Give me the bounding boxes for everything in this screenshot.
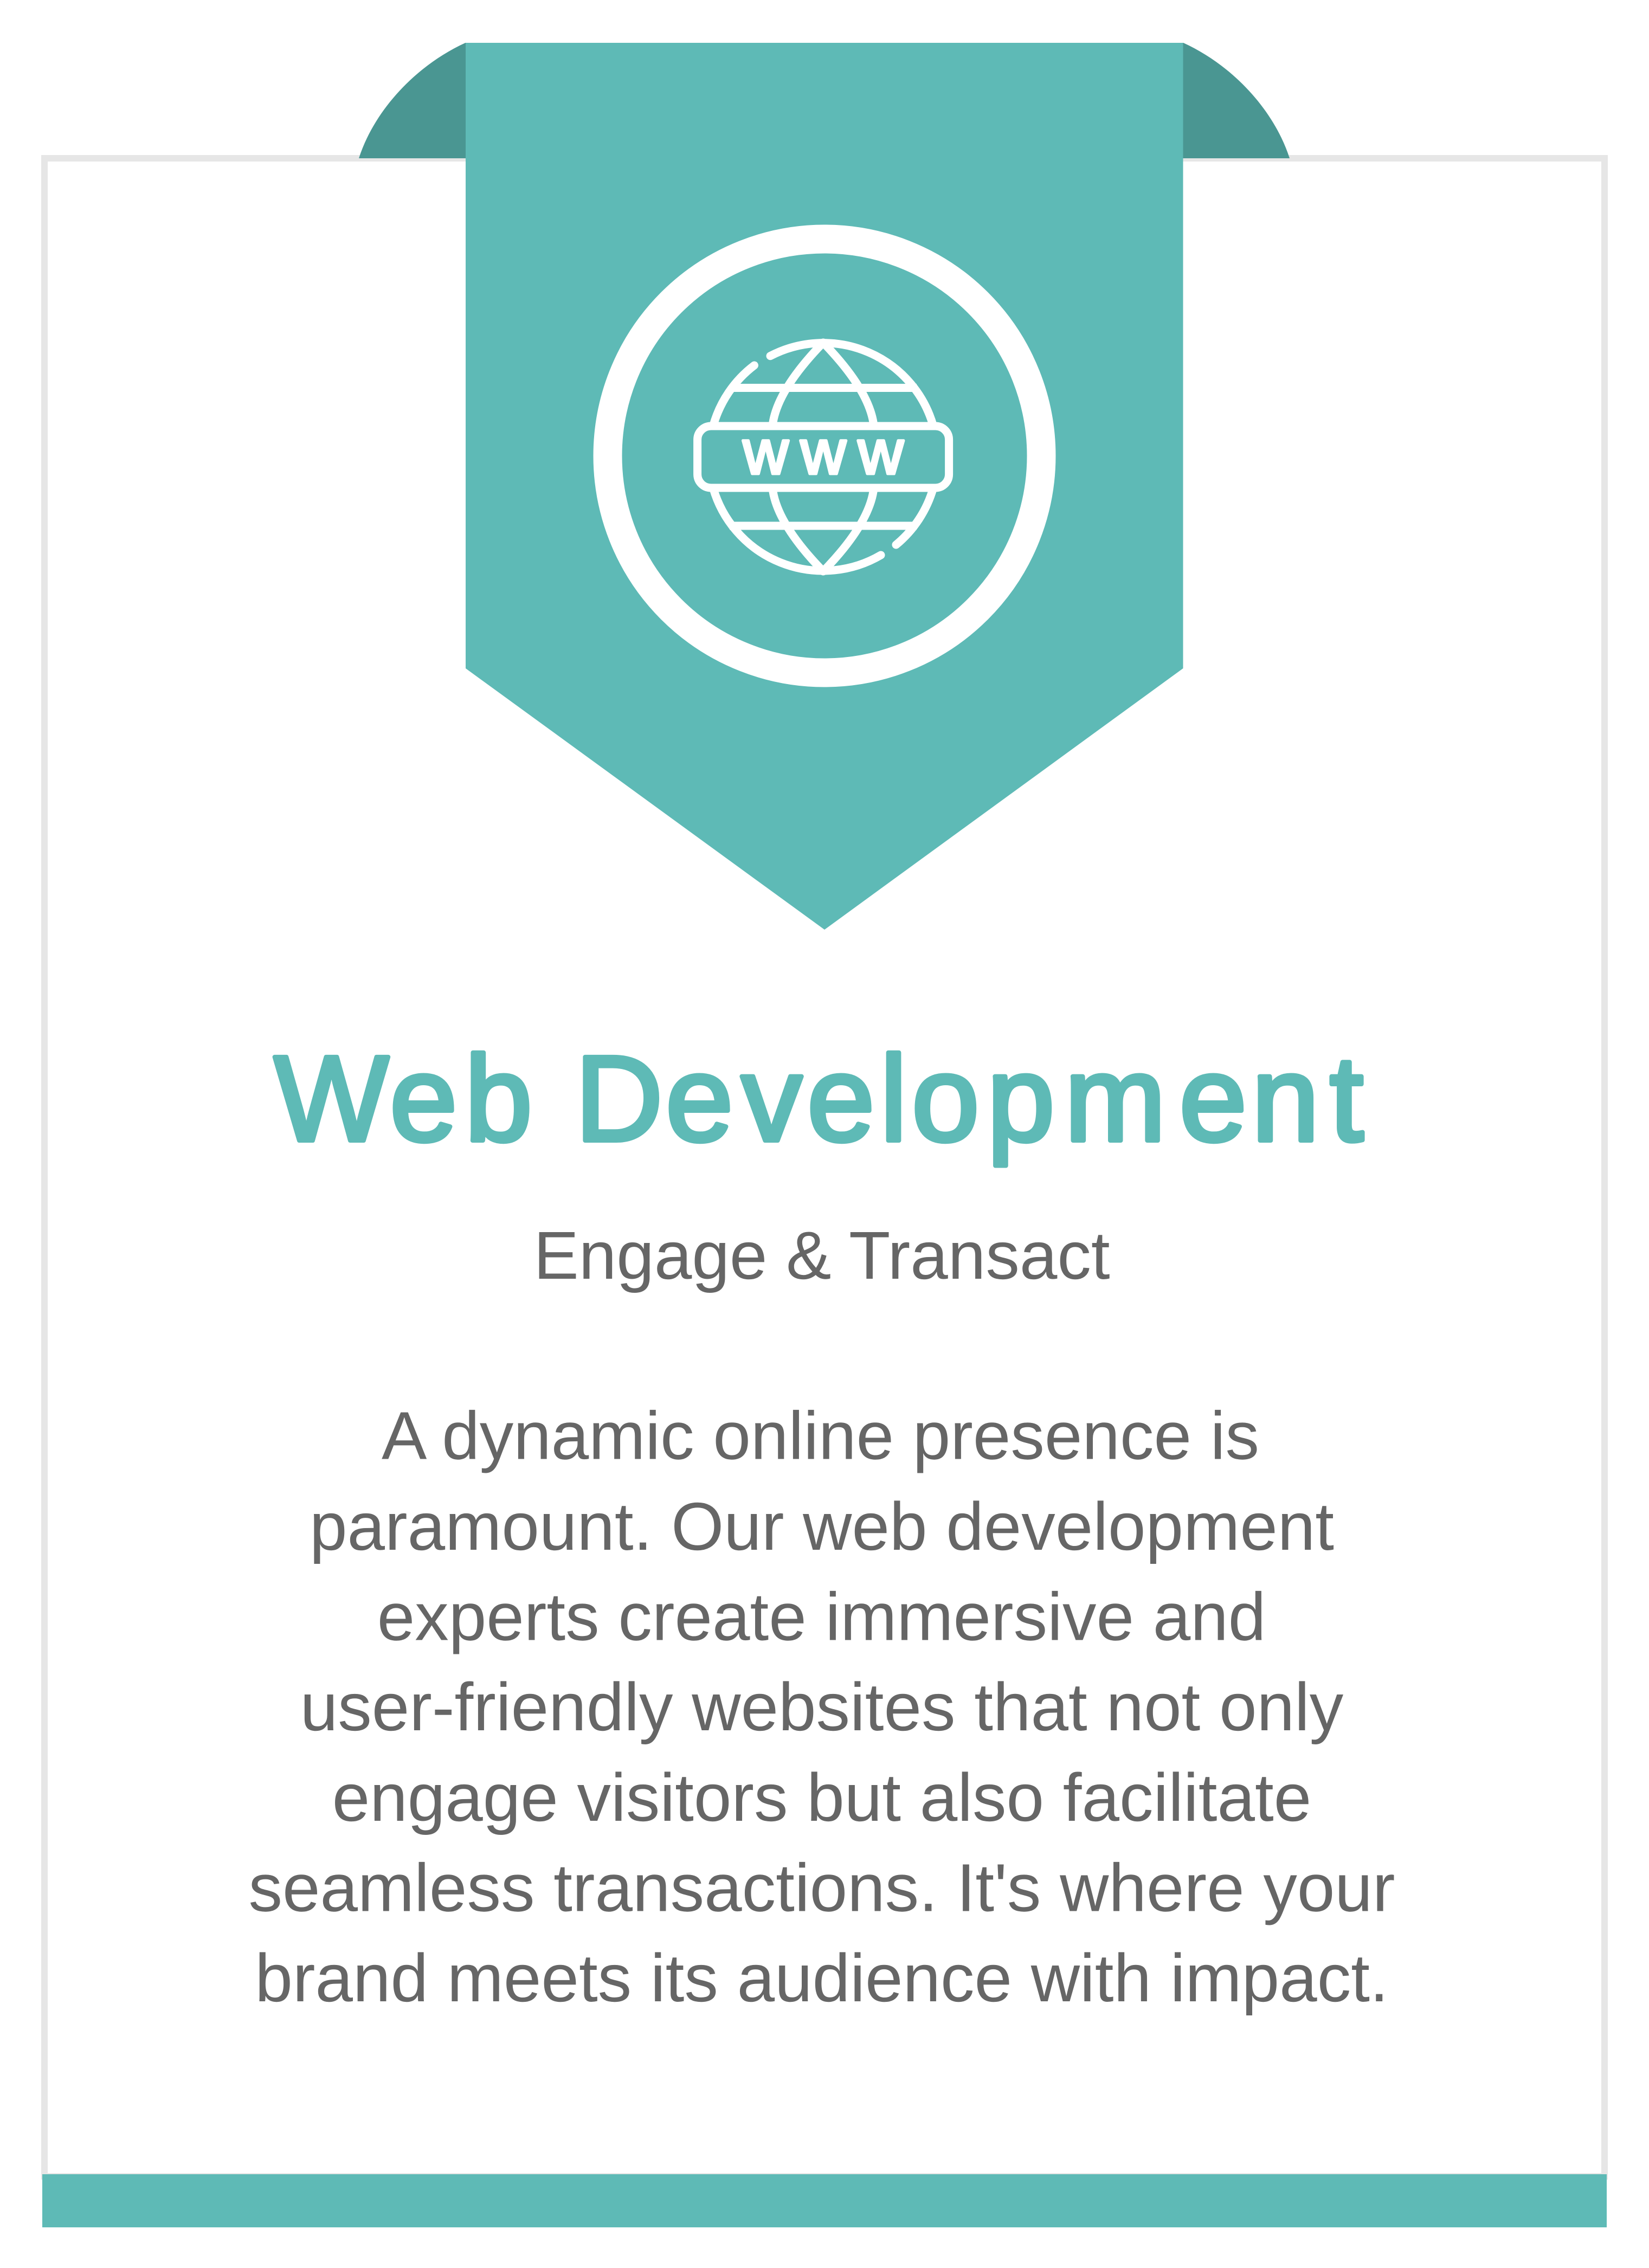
body text: engage visitors but also facilitate [332,1760,1311,1835]
title: Web Development [274,1031,1363,1167]
ribbon back: dark arc [359,43,1290,158]
icon: globe with www: www [743,417,904,487]
body text: paramount. Our web development [310,1489,1334,1564]
body text: user-friendly websites that not only [300,1670,1344,1745]
body text [248,1399,1395,2016]
icon: globe with www [698,343,949,571]
subtitle: Engage & Transact [533,1218,1110,1293]
body text: seamless transactions. It's where your [248,1851,1395,1925]
footer bar [42,2174,1607,2227]
body text: brand meets its audience with impact. [255,1941,1389,2016]
ribbon banner [466,43,1183,930]
body text: experts create immersive and [377,1580,1266,1654]
icon badge: ring [608,239,1041,673]
body text: A dynamic online presence is [382,1399,1259,1473]
